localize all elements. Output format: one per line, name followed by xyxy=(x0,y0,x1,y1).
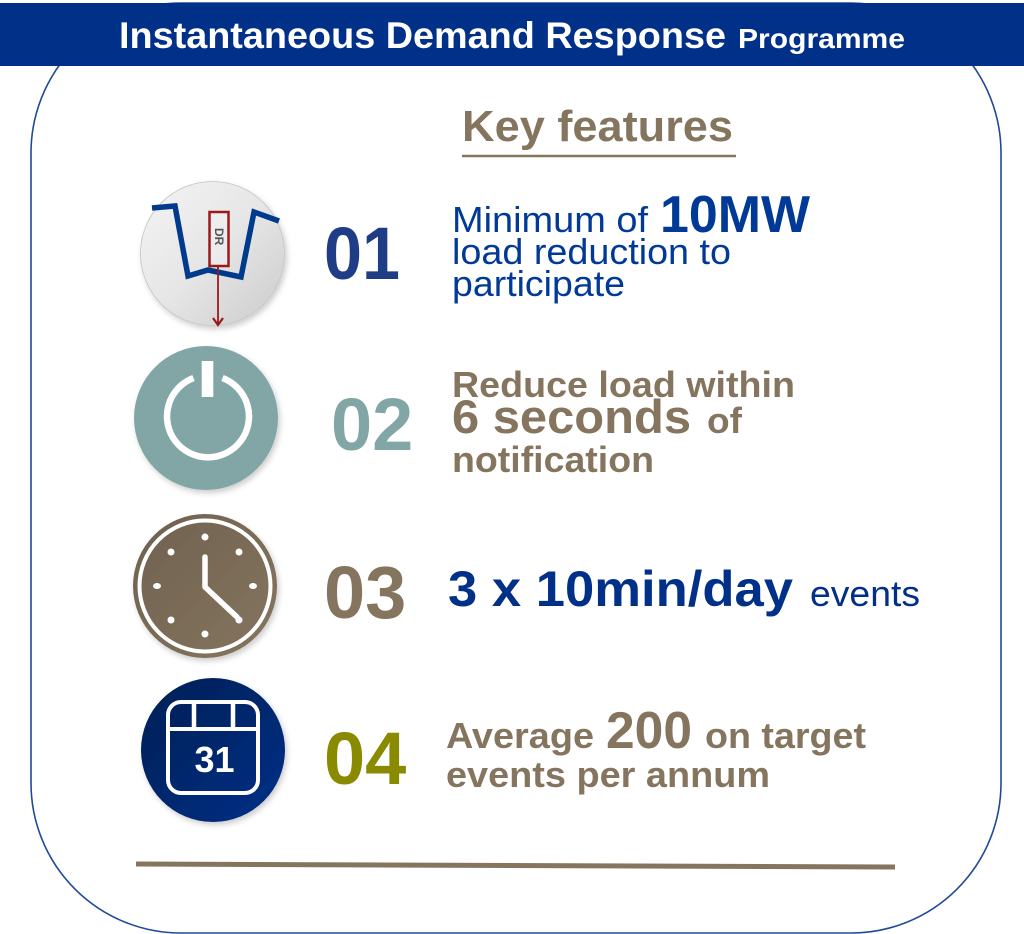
icon: power button xyxy=(134,346,278,490)
icon: demand response curve xyxy=(140,182,284,326)
number 01: 01 xyxy=(324,212,400,295)
text: events per day: events xyxy=(810,573,920,614)
feature 2 xyxy=(134,346,795,490)
feature 4 xyxy=(141,678,866,822)
text: events per day: 3 x 10min/day xyxy=(448,561,793,617)
number 02: 02 xyxy=(331,383,413,466)
icon: calendar: 31 xyxy=(194,739,235,780)
number 04: 04 xyxy=(324,717,406,800)
text: reduce load: notification xyxy=(452,439,654,480)
text: average events xyxy=(446,702,866,795)
text: minimum load: 10MW xyxy=(660,186,811,244)
divider line xyxy=(136,864,895,867)
title banner: Programme xyxy=(738,23,905,54)
text: average events: 200 xyxy=(606,702,692,760)
title banner: Instantaneous Demand Response xyxy=(119,15,726,56)
icon: clock xyxy=(133,514,277,658)
number 03: 03 xyxy=(324,551,406,634)
title banner xyxy=(0,3,1024,66)
icon: calendar xyxy=(141,678,285,822)
text: reduce load xyxy=(452,364,795,480)
text: average events: Average xyxy=(446,715,594,756)
text: reduce load: of xyxy=(707,400,743,441)
feature 3 xyxy=(133,514,920,658)
text: average events: on target xyxy=(705,715,866,756)
text: reduce load: 6 seconds xyxy=(452,390,691,443)
text: average events: events per annum xyxy=(446,754,770,795)
icon: demand response curve: DR xyxy=(212,228,226,246)
feature 1 xyxy=(140,182,811,326)
heading: key features: Key features xyxy=(462,102,733,151)
text: minimum load xyxy=(452,186,811,304)
text: minimum load: load reduction to xyxy=(452,231,731,272)
text: reduce load: Reduce load within xyxy=(452,364,795,405)
text: minimum load: Minimum of xyxy=(452,199,649,240)
text: events per day xyxy=(448,561,920,617)
text: minimum load: participate xyxy=(452,263,625,304)
